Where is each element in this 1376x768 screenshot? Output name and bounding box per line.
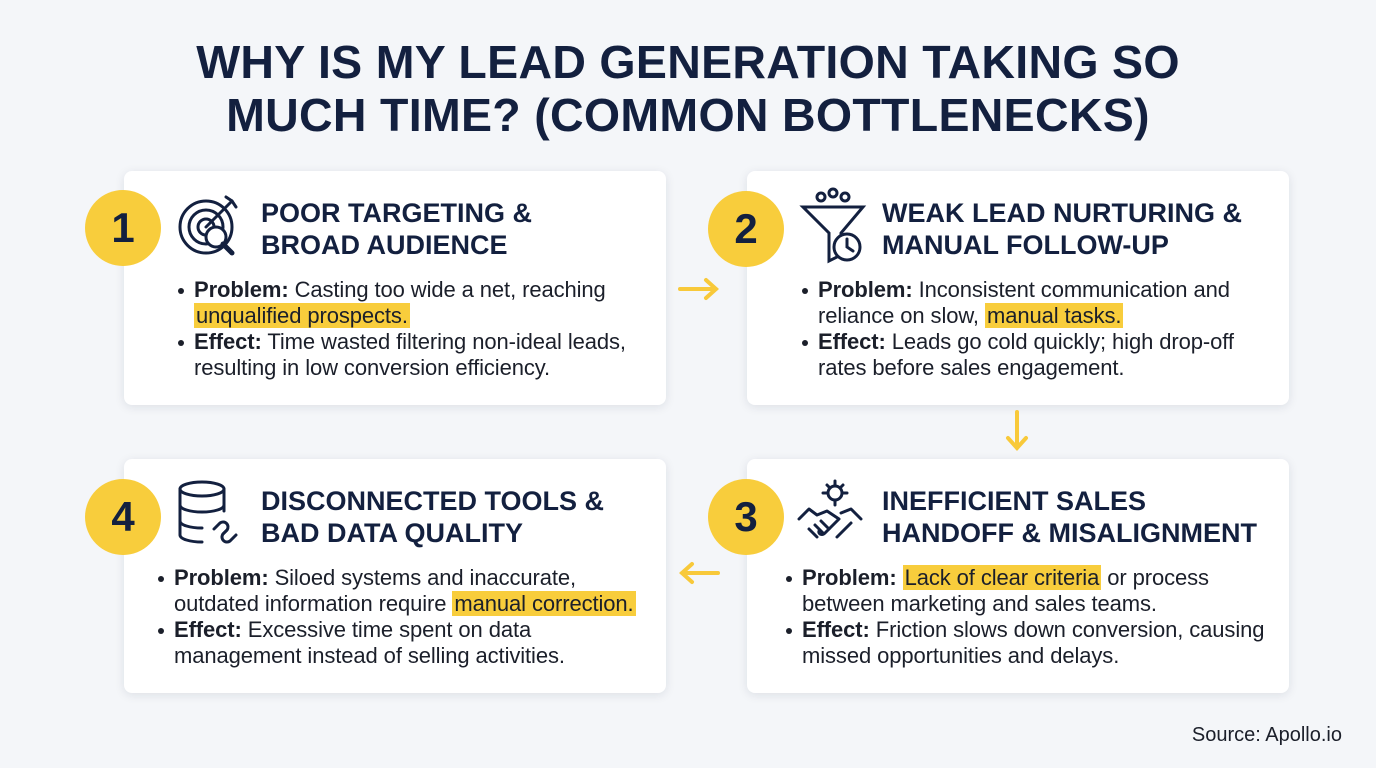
heading 4: BAD DATA QUALITY (261, 518, 523, 548)
badge 3: 3 (734, 493, 758, 540)
heading 3 (882, 486, 1257, 548)
badge 1 (85, 190, 161, 266)
icon: funnel with clock (800, 188, 866, 264)
text block 3: Effect: Friction slows down conversion, causing missed opportunities and delays. (802, 617, 1264, 668)
panel: card 1 poor targeting (124, 171, 666, 405)
badge 2: 2 (734, 205, 758, 252)
arrow: 2 to 3 (1006, 410, 1028, 451)
arrow: 3 to 4 (679, 562, 720, 584)
heading 4 (261, 486, 604, 548)
text block 3 (786, 565, 1264, 668)
text block 2 (802, 277, 1234, 380)
panel: card 3 sales handoff (747, 459, 1289, 693)
icon: handshake with gear (797, 480, 863, 539)
text block 1 (178, 277, 626, 380)
text block 2: Effect: Leads go cold quickly; high drop-off rates before sales engagement. (818, 329, 1234, 380)
source note: Source: Apollo.io (1192, 724, 1342, 746)
title (196, 36, 1180, 141)
text block 1: Problem: Casting too wide a net, reaching unqualified prospects. (194, 277, 606, 328)
badge 3 (708, 479, 784, 555)
text block 4 (158, 565, 636, 668)
badge 4 (85, 479, 161, 555)
badge 1: 1 (111, 204, 135, 251)
heading 4: DISCONNECTED TOOLS & (261, 486, 604, 516)
arrow: 1 to 2 (678, 278, 719, 300)
heading 3: INEFFICIENT SALES (882, 486, 1146, 516)
badge 4: 4 (111, 493, 135, 540)
icon: database with broken link (178, 480, 238, 544)
heading 2 (882, 198, 1242, 260)
heading 2: WEAK LEAD NURTURING & (882, 198, 1242, 228)
text block 3: Problem: Lack of clear criteria or process between marketing and sales teams. (802, 565, 1209, 616)
title: WHY IS MY LEAD GENERATION TAKING SO (196, 36, 1180, 88)
heading 1: POOR TARGETING & (261, 198, 532, 228)
icon: target with magnifier (178, 195, 238, 256)
panel: card 4 disconnected tools (124, 459, 666, 693)
text block 2: Problem: Inconsistent communication and reliance on slow, manual tasks. (818, 277, 1230, 328)
heading 1 (261, 198, 532, 260)
heading 1: BROAD AUDIENCE (261, 230, 508, 260)
panel: card 2 weak nurturing (747, 171, 1289, 405)
badge 2 (708, 191, 784, 267)
heading 3: HANDOFF & MISALIGNMENT (882, 518, 1257, 548)
heading 2: MANUAL FOLLOW-UP (882, 230, 1169, 260)
text block 4: Problem: Siloed systems and inaccurate, outdated information require manual correction. (174, 565, 634, 616)
text block 4: Effect: Excessive time spent on data management instead of selling activities. (174, 617, 565, 668)
text block 1: Effect: Time wasted filtering non-ideal leads, resulting in low conversion efficiency. (194, 329, 626, 380)
title: MUCH TIME? (COMMON BOTTLENECKS) (226, 89, 1150, 141)
